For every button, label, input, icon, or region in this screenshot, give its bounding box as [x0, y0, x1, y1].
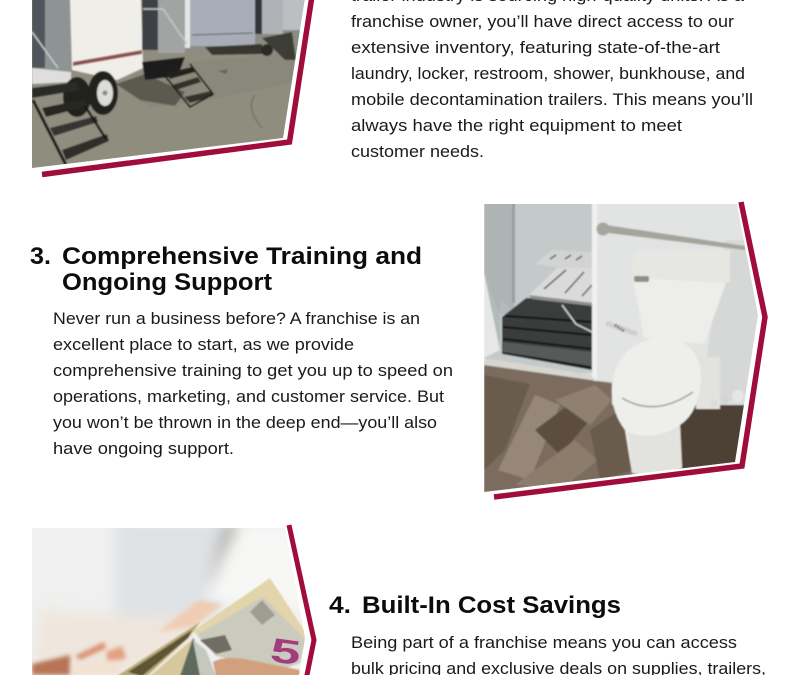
- heading: point 3: 3.: [30, 243, 51, 270]
- heading: point 3: Ongoing Support: [62, 269, 272, 296]
- photo: hands counting dollar bills: [30, 520, 310, 675]
- wall: [593, 374, 612, 382]
- text block: point 4 body: Being part of a franchise means you can access: [351, 633, 737, 652]
- panel: body text continued from point 2: [351, 0, 753, 161]
- panel: body text continued from point 2: laundry, locker, restroom, shower, bunkhouse, and: [351, 64, 745, 83]
- text block: point 3 body: [53, 309, 453, 458]
- photo: accessible toilet and fold-down shower seat: [484, 203, 764, 500]
- text block: point 3 body: operations, marketing, and customer service. But: [53, 387, 444, 406]
- panel: body text continued from point 2: extensive inventory, featuring state-of-the-art: [351, 38, 720, 57]
- photo: restroom trailers in parking lot: [30, 0, 310, 173]
- panel: body text continued from point 2: mobile decontamination trailers. This means you’ll: [351, 90, 753, 109]
- panel: cash photo with crimson frame: [30, 520, 314, 675]
- heading: point 3: [30, 243, 422, 296]
- toilet: [718, 250, 730, 283]
- text block: point 3 body: you won’t be thrown in the deep end—you’ll also: [53, 413, 437, 432]
- text block: point 4 body: [351, 633, 766, 675]
- heading: point 4: 4.: [329, 592, 351, 619]
- panel: body text continued from point 2: franchise owner, you’ll have direct access to our: [351, 12, 734, 31]
- panel: restroom photo with crimson frame: [484, 202, 765, 500]
- heading: point 3: Comprehensive Training and: [62, 243, 422, 270]
- text block: point 3 body: comprehensive training to get you up to speed on: [53, 361, 453, 380]
- crimson frame line: [42, 0, 312, 174]
- text block: point 3 body: excellent place to start, as we provide: [53, 335, 354, 354]
- bill numeral: 5: [268, 631, 303, 673]
- text block: point 3 body: Never run a business before? A franchise is an: [53, 309, 420, 328]
- grab bar: [600, 224, 745, 250]
- crimson frame line: [494, 202, 765, 497]
- panel: body text continued from point 2: always have the right equipment to meet: [351, 116, 682, 135]
- crimson frame line: [289, 525, 314, 675]
- wood floor: [484, 364, 640, 492]
- text block: point 3 body: have ongoing support.: [53, 439, 234, 458]
- panel: trailer photo with crimson frame: [30, 0, 312, 174]
- panel: body text continued from point 2: customer needs.: [351, 142, 484, 161]
- heading: point 4: Built-In Cost Savings: [362, 592, 621, 619]
